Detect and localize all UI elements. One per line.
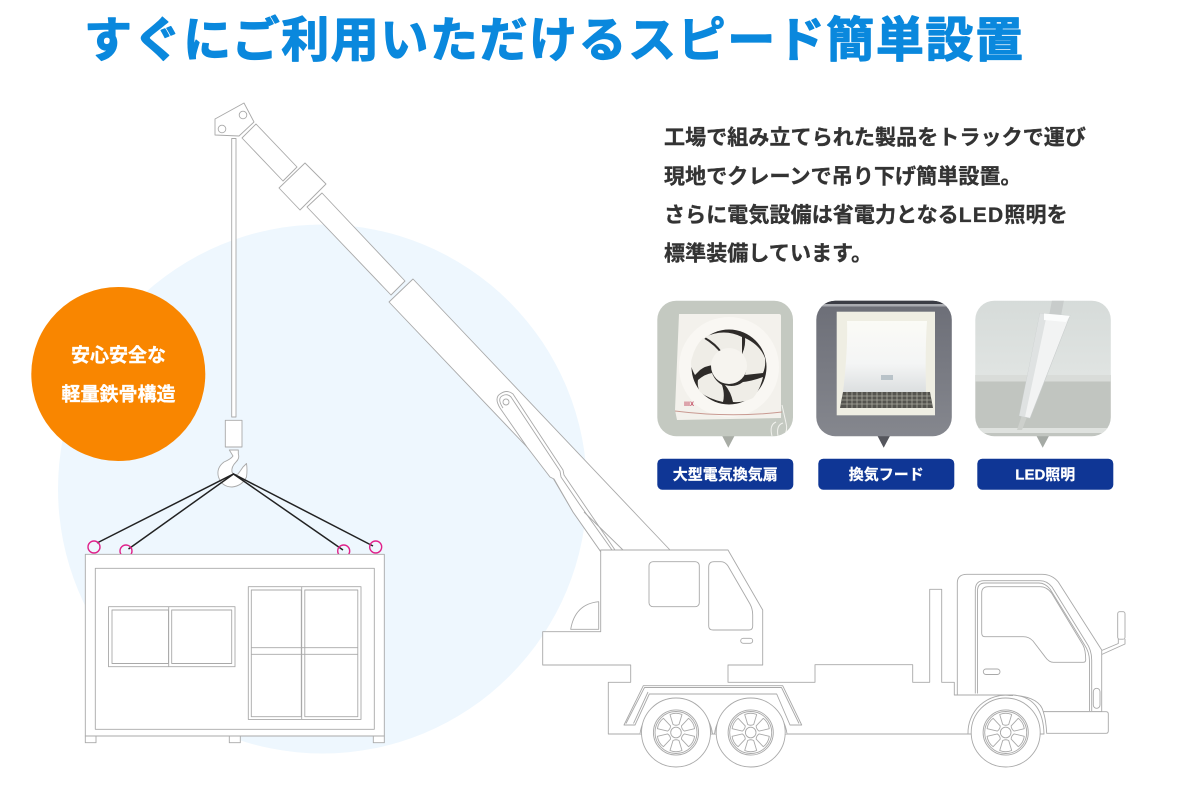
sliding door: [248, 587, 361, 719]
label: ventilation hood: 換気フード: [849, 466, 924, 484]
callout: orange circle: 軽量鉄骨構造: [61, 384, 176, 406]
wheels: [640, 695, 1040, 767]
lifting slings: [97, 474, 373, 550]
crane truck illustration: [215, 103, 1125, 767]
label: LED lighting: LED照明: [1015, 466, 1075, 484]
photo: LED light: [975, 300, 1111, 448]
title: すぐにご利用いただけるスピード簡単設置: [84, 14, 1024, 68]
label: large ventilation fan: 大型電気換気扇: [673, 466, 778, 484]
background circle: [58, 224, 587, 754]
description text: 標準装備しています。: [664, 242, 872, 266]
label: large ventilation fan: [657, 459, 793, 490]
description text: 工場で組み立てられた製品をトラックで運び: [664, 126, 1086, 150]
photo: ventilation hood: [816, 300, 952, 448]
fender: [624, 686, 802, 725]
callout: orange circle: 安心安全な: [71, 344, 166, 366]
lifting points: [88, 541, 382, 557]
crane boom: [215, 103, 670, 552]
photo: ventilation fan: ⅢX: [684, 401, 694, 408]
photo: ventilation fan: [657, 300, 793, 448]
description text: さらに電気設備は省電力となるLED照明を: [664, 204, 1068, 227]
prefab building: [85, 554, 384, 743]
callout: orange circle: [31, 287, 205, 461]
window: [108, 607, 235, 667]
crane windows: [571, 562, 753, 643]
description text: 現地でクレーンで吊り下げ簡単設置。: [664, 166, 1022, 188]
description text: [664, 126, 1086, 266]
label: LED lighting: [977, 459, 1113, 490]
crane rope and hook: [218, 138, 247, 487]
truck cab: [957, 574, 1125, 733]
label: ventilation hood: [818, 459, 954, 490]
crane cab and chassis: [543, 550, 1044, 734]
